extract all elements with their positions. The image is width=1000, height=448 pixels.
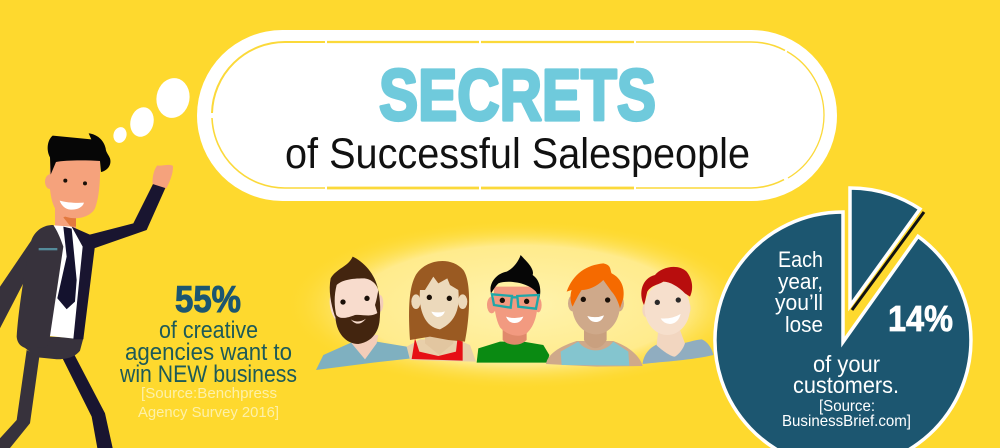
source line 1: [Source:Benchpress xyxy=(141,385,277,402)
man: shirt xyxy=(50,225,84,339)
pie label: of your customers: customers. xyxy=(793,372,899,398)
pie label: each year: lose xyxy=(785,312,823,337)
man: neck xyxy=(55,208,76,228)
man: raised arm xyxy=(88,183,166,248)
stat text: 55% xyxy=(119,279,297,421)
pie label: 14 percent: 14% xyxy=(888,298,953,339)
man: eyes xyxy=(63,179,67,183)
pie label: source: [Source: xyxy=(819,398,875,415)
thought bubbles xyxy=(112,75,193,144)
man: badge xyxy=(39,248,57,250)
pie label: each year: Each xyxy=(778,247,823,272)
man: hand xyxy=(153,165,173,188)
pie label: each year: you’ll xyxy=(775,290,823,315)
man: right leg xyxy=(62,354,113,448)
pie detached slice shadow xyxy=(852,212,924,310)
person 1: bearded man xyxy=(316,257,412,370)
man: ear xyxy=(45,174,55,189)
pie label: each year: year, xyxy=(778,269,823,294)
pie label: of your customers xyxy=(793,351,899,398)
title pill xyxy=(197,30,837,201)
person 5: woman with red hair xyxy=(641,267,713,364)
pie label: source: BusinessBrief.com] xyxy=(782,413,911,430)
person 3: man with glasses xyxy=(477,255,549,363)
person 4: woman with orange hair xyxy=(546,263,643,367)
man: tie xyxy=(57,227,77,309)
man: jacket right xyxy=(72,227,95,339)
pie detached slice xyxy=(850,188,920,306)
title: SECRETS: SECRETS xyxy=(379,56,656,136)
pie label: source xyxy=(782,398,911,430)
man: face xyxy=(49,155,100,218)
creative agencies line 1: of creative xyxy=(159,317,258,344)
pie main slice xyxy=(715,212,971,448)
creative agencies line 3: win NEW business xyxy=(119,361,297,388)
pie label: of your customers: of your xyxy=(813,351,880,377)
team of five people xyxy=(316,255,713,370)
person 2: woman with brown hair xyxy=(407,261,476,362)
character: salesman xyxy=(0,133,173,448)
creative agencies line 2: agencies want to xyxy=(125,339,292,366)
man: back arm xyxy=(0,240,32,328)
source line 2: Agency Survey 2016] xyxy=(138,404,279,421)
man: smile xyxy=(60,201,84,210)
man: left leg xyxy=(0,350,39,448)
pie chart xyxy=(715,188,971,448)
man: hair xyxy=(48,133,110,175)
glow behind team xyxy=(285,220,755,390)
man: trousers xyxy=(23,337,83,359)
subtitle: of Successful Salespeople xyxy=(285,130,750,178)
man: jacket left xyxy=(17,225,63,349)
55 percent: 55% xyxy=(175,279,241,320)
pie label: each year xyxy=(775,247,823,337)
